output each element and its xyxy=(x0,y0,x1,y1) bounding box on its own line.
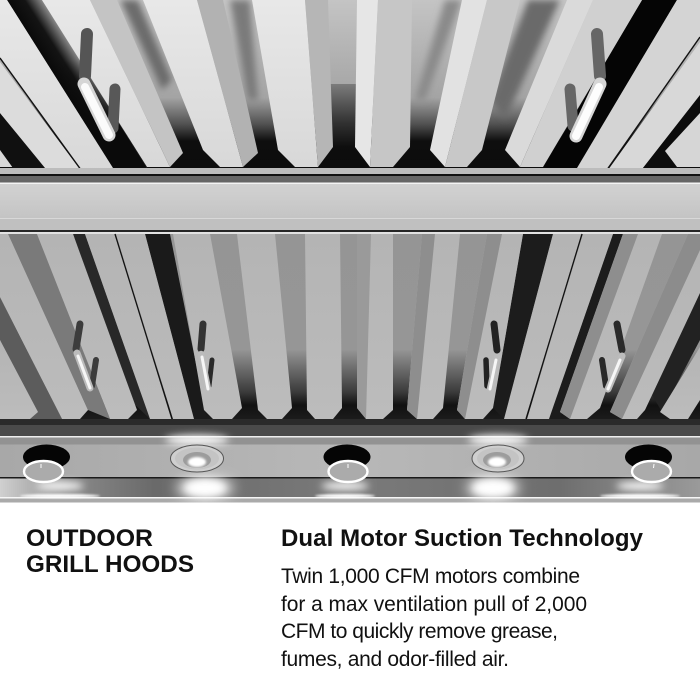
lower baffles right xyxy=(357,234,700,419)
knob: left xyxy=(23,444,70,482)
baffle 3 xyxy=(252,0,333,167)
feature description: fumes, and odor-filled air. xyxy=(281,648,509,671)
feature description: Twin 1,000 CFM motors combine xyxy=(281,565,580,588)
title: OUTDOOR xyxy=(26,525,153,552)
panel: upper baffle filters xyxy=(0,0,700,174)
light fixture: right xyxy=(472,445,524,472)
handle: lower 2 xyxy=(201,324,212,389)
title: GRILL HOODS xyxy=(26,551,194,578)
handle: lower 3 xyxy=(486,324,497,389)
handle: lower 4 xyxy=(602,324,622,389)
feature description xyxy=(281,565,587,671)
title xyxy=(26,525,194,578)
feature description: CFM to quickly remove grease, xyxy=(281,620,558,643)
baffle 2 xyxy=(143,0,258,167)
light fixture: left xyxy=(170,445,224,472)
knob: centre xyxy=(324,444,370,482)
handle: upper left xyxy=(84,34,115,135)
lower baffles left xyxy=(0,234,342,419)
knob: right xyxy=(625,444,672,482)
feature description: for a max ventilation pull of 2,000 xyxy=(281,593,587,616)
panel: control strip xyxy=(0,419,700,502)
baffle 5 xyxy=(430,0,520,167)
baffle 1 xyxy=(42,0,183,167)
baffle 6 xyxy=(505,0,642,167)
handle: lower 1 xyxy=(76,324,96,388)
rail: horizontal bar xyxy=(0,168,700,234)
light reflections xyxy=(20,435,680,498)
panel: lower baffle filters xyxy=(0,234,700,420)
baffle: far left xyxy=(0,125,26,167)
baffle 4 xyxy=(355,0,412,167)
handle: upper right xyxy=(570,34,600,136)
feature heading: Dual Motor Suction Technology xyxy=(281,525,644,552)
right side panels xyxy=(577,0,700,174)
